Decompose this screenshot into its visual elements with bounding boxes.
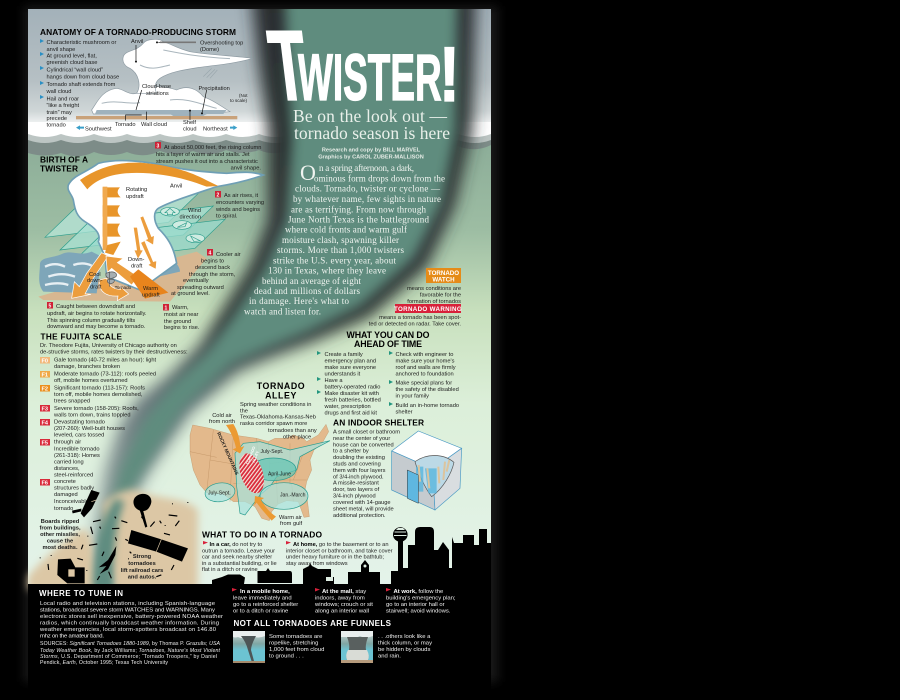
- storm cutaway labels: updraft: [126, 194, 144, 200]
- tornado alley text and map labels: tornadoes than any: [268, 428, 317, 434]
- thumbnail: rope tornado: [233, 631, 265, 663]
- what you can do lists: fresh batteries, bottled: [324, 398, 381, 404]
- anatomy labels: Northeast: [203, 126, 228, 132]
- where to tune in: Pendick, Earth, October 1995; Texas Tech University: [40, 660, 168, 666]
- tornado alley heading: ALLEY: [265, 390, 297, 400]
- what to do continued: At work, follow the: [394, 589, 444, 595]
- intro story text: [244, 160, 445, 316]
- indoor shelter text: A small closet or bathroom: [333, 430, 400, 436]
- what you can do lists: Create a family: [324, 352, 363, 358]
- fujita scale list: concrete: [54, 479, 76, 485]
- tornado watch and warning: means a tornado has been spot-: [379, 315, 461, 321]
- intro story text: strike the U.S. every year, about: [273, 256, 396, 266]
- tornado alley text and map labels: from north: [209, 419, 235, 425]
- storm cutaway labels: [87, 184, 201, 298]
- anatomy labels: Tornado: [115, 122, 136, 128]
- birth callouts: downward and may become a tornado.: [47, 324, 146, 330]
- tornado alley heading: TORNADO: [257, 381, 305, 391]
- fujita scale list: de-structive storms, rates twisters by their destructiveness:: [40, 350, 188, 356]
- byline: [318, 148, 424, 160]
- where to tune in: SOURCES: Significant Tornadoes 1880-1989, by Thomas P. Grazulis; USA: [40, 641, 221, 647]
- funnel captions: [269, 634, 432, 660]
- storm cutaway labels: down-: [87, 278, 103, 284]
- funnel captions: thick column, or may: [378, 640, 432, 646]
- what you can do lists: emergency plan and: [324, 358, 376, 364]
- intro story text: O: [300, 160, 316, 185]
- what you can do lists: the safety of the disabled: [396, 387, 459, 393]
- storm cutaway labels: Anvil: [170, 184, 182, 190]
- birth callouts: spreading outward: [177, 285, 224, 291]
- intro story text: behind an average of eight: [262, 276, 361, 286]
- what you can do lists: Have a: [324, 378, 343, 384]
- tornado alley text and map labels: [208, 402, 317, 527]
- anatomy labels: Shelf: [183, 120, 196, 126]
- anatomy labels: striations: [146, 91, 169, 97]
- fujita scale list: Moderate tornado (73-112): roofs peeled: [54, 372, 156, 378]
- not all tornadoes are funnels: NOT ALL TORNADOES ARE FUNNELS: [234, 619, 392, 628]
- intro story text: dead and millions of dollars: [254, 286, 360, 296]
- fujita scale list: off, mobile homes overturned: [54, 378, 128, 384]
- birth callouts: at ground level.: [171, 291, 210, 297]
- anatomy bullet list: hangs down from cloud base: [46, 74, 119, 80]
- birth callouts: hits a layer of warm air and stalls. Jet: [156, 152, 250, 158]
- fujita scale list: Gale tornado (40-72 miles an hour): light: [54, 358, 157, 364]
- anatomy bullet list: train” may: [46, 110, 72, 116]
- birth callouts: 5: [48, 304, 52, 310]
- anatomy labels: [85, 39, 248, 132]
- subtitle: Be on the look out —: [293, 106, 448, 126]
- what to do text: stay away from windows: [286, 561, 348, 567]
- indoor shelter text: sheet metal, will provide: [333, 506, 394, 512]
- where to tune in: Today Weather Book, by Jack Williams; Tornadoes, Nature's Most Violent: [40, 648, 221, 654]
- birth callouts: At about 50,000 feet, the rising column: [164, 145, 261, 151]
- fujita scale list: tornado: [54, 506, 73, 512]
- fujita scale list: F6: [42, 480, 48, 486]
- what you can do lists: anchored to foundation: [396, 372, 454, 378]
- sky and ground background: [28, 9, 491, 586]
- what to do continued: along an interior wall: [315, 608, 369, 614]
- what you can do lists: Make special plans for: [396, 380, 452, 386]
- intro story text: n a spring afternoon, a dark,: [319, 163, 414, 173]
- debris captions: most deaths.: [42, 545, 78, 551]
- what to do text: in a substantial building, or lie: [202, 561, 277, 567]
- birth callouts: This spinning column gradually tilts: [47, 318, 135, 324]
- fujita scale list: Devastating tornado: [54, 420, 105, 426]
- fujita scale list: trees snapped: [54, 398, 90, 404]
- what you can do lists: water, prescription: [324, 404, 371, 410]
- storm cutaway labels: draft: [131, 264, 143, 270]
- indoor shelter text: 3/4-inch plywood: [333, 494, 376, 500]
- what you can do lists: make sure everyone: [324, 365, 376, 371]
- birth callouts: 1: [164, 306, 168, 312]
- byline: Graphics by CAROL ZUBER-MALLISON: [318, 154, 424, 160]
- storm cutaway labels: Wind: [188, 208, 201, 214]
- fujita scale list: torn off, mobile homes demolished,: [54, 392, 143, 398]
- tornado alley text and map labels: ALLEY: [252, 450, 260, 463]
- what to do heading: WHAT TO DO IN A TORNADO: [202, 530, 322, 540]
- tornado alley text and map labels: ROCKY MOUNTAINS: [216, 431, 239, 476]
- indoor shelter text: of 3/4-inch plywood.: [333, 474, 384, 480]
- what to do text: interior closet or bathroom, and take cover: [286, 548, 393, 554]
- anatomy bullet list: Characteristic mushroom or: [46, 40, 116, 46]
- debris captions: other missiles,: [40, 532, 80, 538]
- where to tune in: WHERE TO TUNE IN: [39, 589, 123, 598]
- anatomy labels: (Not: [239, 93, 248, 98]
- what to do continued: leave immediately and: [233, 596, 292, 602]
- what to do continued: go to an interior hall or: [386, 602, 445, 608]
- what you can do lists: roof and walls are firmly: [396, 365, 456, 371]
- where to tune in: Storms, U.S. Department of Commerce; “Tornado Troopers,” by Daniel: [40, 654, 217, 660]
- birth callouts: moist air near: [164, 312, 199, 318]
- what to do text: car and seek nearby shelter: [202, 554, 272, 560]
- tornado alley text and map labels: Texas-Oklahoma-Kansas-Neb: [240, 414, 316, 420]
- anatomy bullet list: Cylindrical “wall cloud”: [46, 68, 103, 74]
- debris captions: cause the: [47, 538, 73, 544]
- debris captions: Strong: [133, 554, 152, 560]
- car: [212, 574, 245, 584]
- anatomy labels: Cloud-base: [142, 84, 171, 90]
- intro story text: storms. More than 1,000 twisters: [277, 245, 404, 255]
- fujita scale list: Dr. Theodore Fujita, University of Chicago authority on: [40, 343, 177, 349]
- anatomy labels: to scale): [230, 98, 248, 103]
- funnel captions: to ground . . .: [269, 654, 304, 660]
- tornado watch and warning: formation of tornados: [407, 299, 461, 305]
- reunion tower: [398, 541, 403, 573]
- indoor shelter text: [333, 430, 400, 519]
- indoor shelter text: additional protection.: [333, 513, 386, 519]
- subtitle: [293, 106, 450, 143]
- debris captions: from buildings,: [39, 526, 81, 532]
- fujita scale list: F1: [42, 372, 48, 378]
- subtitle: tornado season is here: [294, 123, 450, 143]
- what you can do lists: Build an in-home tornado: [396, 403, 459, 409]
- indoor shelter text: studs and covering: [333, 462, 381, 468]
- title: T: [263, 10, 313, 122]
- funnel captions: be hidden by clouds: [378, 647, 430, 653]
- debris captions: Boards ripped: [41, 519, 80, 525]
- what to do continued: In a mobile home,: [240, 589, 290, 595]
- title: WISTER: [298, 42, 442, 115]
- birth callouts: As air rises, it: [224, 193, 259, 199]
- fujita scale list: F3: [42, 406, 48, 412]
- indoor shelter text: house can be converted: [333, 442, 394, 448]
- what you can do lists: battery-operated radio: [324, 384, 380, 390]
- where to tune in: Local radio and television stations, including Spanish-language: [40, 601, 216, 607]
- what to do continued: or to a ditch or ravine: [233, 608, 289, 614]
- intro story text: moisture clash, spawning killer: [282, 235, 399, 245]
- byline: Research and copy by BILL MARVEL: [322, 148, 421, 154]
- fujita scale list: damage, branches broken: [54, 364, 120, 370]
- tornado watch and warning: favorable for the: [420, 292, 461, 298]
- birth callouts: descend back: [195, 265, 230, 271]
- fujita scale list: through air: [54, 440, 81, 446]
- intro story text: by whatever name, few sights in nature: [293, 194, 441, 204]
- anatomy bullet list: [40, 39, 119, 128]
- birth callouts: through the storm,: [189, 272, 236, 278]
- what you can do heading: AHEAD OF TIME: [354, 339, 422, 349]
- storm cutaway labels: draft: [90, 284, 102, 290]
- anatomy labels: Precipitation: [198, 86, 230, 92]
- fujita scale list: Severe tornado (158-205): Roofs,: [54, 406, 139, 412]
- birth callouts: winds and begins: [215, 207, 260, 213]
- what you can do lists: Make disaster kit with: [324, 391, 379, 397]
- what to do text: At home, go to the basement or to an: [293, 542, 388, 548]
- birth callouts: encounters varying: [216, 200, 264, 206]
- birth callouts: 3: [156, 144, 160, 150]
- fujita scale list: leveled, cars tossed: [54, 432, 104, 438]
- what to do text: outrun a tornado. Leave your: [202, 548, 275, 554]
- anatomy labels: cloud: [183, 126, 197, 132]
- anatomy labels: (Dome): [200, 47, 219, 53]
- what to do continued: indoors, away from: [315, 596, 365, 602]
- tornado watch and warning: WATCH: [432, 276, 455, 284]
- fujita scale list: structures badly: [54, 486, 94, 492]
- tornado alley text and map labels: Warm air: [279, 515, 302, 521]
- indoor shelter text: to a shelter by: [333, 448, 369, 454]
- indoor shelter text: near the center of your: [333, 436, 390, 442]
- debris captions: and autos.: [128, 574, 157, 580]
- funnel captions: and rain.: [378, 654, 401, 660]
- fujita scale list: Incredible tornado: [54, 446, 100, 452]
- fujita scale list: F4: [42, 420, 49, 426]
- anatomy bullet list: greenish cloud base: [46, 60, 97, 66]
- what to do continued: At the mall, stay: [322, 589, 366, 595]
- indoor shelter text: door, two layers of: [333, 487, 380, 493]
- where to tune in: radios, which continually broadcast weather information. During: [40, 620, 219, 626]
- what to do continued: [232, 588, 456, 614]
- what to do text: under heavy furniture or in the bathtub;: [286, 554, 384, 560]
- what you can do lists: drugs and first aid kit: [324, 410, 377, 416]
- intro story text: where cold fronts and warm gulf: [285, 224, 407, 234]
- where to tune in: electronic stores sell inexpensive, battery-powered NOAA weather: [40, 614, 223, 620]
- debris captions: lift railroad cars: [121, 568, 163, 574]
- debris captions: tornadoes: [128, 561, 156, 567]
- intro story text: ominous form drops down from the: [314, 174, 445, 184]
- fujita scale list: (207-260): Well-built houses: [54, 426, 125, 432]
- anatomy bullet list: “like a freight: [46, 103, 79, 109]
- anatomy bullet list: precede: [46, 116, 67, 122]
- what to do text: flat in a ditch or ravine: [202, 567, 258, 573]
- birth callouts: begins to rise.: [164, 325, 200, 331]
- where to tune in: [39, 589, 223, 666]
- fujita scale list: distances,: [54, 466, 80, 472]
- anatomy labels: Wall cloud: [141, 122, 167, 128]
- house: [303, 563, 334, 585]
- fujita scale list: Inconceivable: [54, 499, 89, 505]
- tornado alley heading: [257, 381, 305, 400]
- what to do continued: building's emergency plan;: [386, 596, 456, 602]
- birth callouts: 2: [216, 192, 220, 198]
- thumbnail: thick column tornado: [341, 631, 373, 663]
- storm cutaway labels: Down-: [128, 257, 145, 263]
- title: [263, 10, 460, 122]
- indoor shelter text: doubling the existing: [333, 455, 385, 461]
- intro story text: clouds. Tornado, twister or cyclone —: [295, 184, 441, 194]
- storm cutaway labels: updraft: [142, 292, 160, 298]
- birth callouts: to spiral.: [216, 214, 238, 220]
- funnel captions: . . .others look like a: [378, 634, 431, 640]
- tornado funnel: [85, 0, 476, 600]
- mobile home: [258, 568, 292, 583]
- birth callouts: begins to: [201, 258, 224, 264]
- birth of a twister heading: BIRTH OF A: [40, 154, 88, 164]
- storm cutaway labels: Tornado: [115, 285, 132, 290]
- fujita scale list: Significant tornado (113-157): Roofs: [54, 386, 145, 392]
- tornado alley text and map labels: TORNADO: [245, 446, 256, 465]
- birth callouts: 4: [208, 250, 212, 256]
- indoor shelter text: them with four layers: [333, 468, 386, 474]
- tornado watch and warning: ted or detected on radar. Take cover.: [369, 322, 461, 328]
- what you can do heading: [346, 330, 430, 349]
- storm cutaway labels: direction: [180, 214, 201, 220]
- tornado alley text and map labels: July-Sept.: [260, 449, 283, 455]
- birth callouts: eventually: [183, 278, 209, 284]
- birth callouts: [47, 142, 264, 331]
- where to tune in: weather emergencies, local storm-spotters broadcast on 146.80: [39, 627, 217, 633]
- what you can do lists: understands it: [324, 372, 361, 378]
- birth callouts: Caught between downdraft and: [56, 304, 135, 310]
- storm cutaway labels: Rotating: [126, 187, 147, 193]
- anatomy bullet list: anvil shape: [46, 47, 75, 53]
- what to do continued: stairwell; avoid windows.: [386, 608, 451, 614]
- dallas skyline: [391, 527, 491, 585]
- birth callouts: Cooler air: [216, 252, 241, 258]
- us map: [190, 424, 330, 521]
- birth callouts: anvil shape.: [231, 166, 261, 172]
- intro story text: June North Texas is the battleground: [288, 214, 430, 224]
- tornado alley text and map labels: raska corridor spawn more: [240, 421, 307, 427]
- anatomy labels: Overshooting top: [200, 40, 243, 46]
- fujita scale list: carried long: [54, 460, 84, 466]
- what you can do heading: WHAT YOU CAN DO: [346, 330, 430, 340]
- indoor shelter text: covered with 14-gauge: [333, 500, 391, 506]
- birth callouts: stream pushes it out into a characteristic: [156, 159, 258, 165]
- what to do text: [202, 541, 393, 573]
- birth callouts: the ground: [164, 319, 191, 325]
- anatomy bullet list: At ground level, flat,: [46, 54, 97, 60]
- funnel captions: ropelike, stretching: [269, 640, 318, 646]
- what to do continued: windows; crouch or sit: [314, 602, 373, 608]
- anatomy bullet list: tornado: [46, 122, 66, 128]
- what you can do lists: [317, 351, 459, 416]
- what you can do lists: Check with engineer to: [396, 352, 453, 358]
- where to tune in: mhz on the amateur band.: [40, 634, 104, 640]
- storm cutaway labels: Warm: [143, 286, 158, 292]
- anatomy labels: Southwest: [85, 126, 112, 132]
- title: !: [439, 30, 460, 118]
- what to do text: In a car, do not try to: [210, 542, 262, 548]
- anatomy heading: ANATOMY OF A TORNADO-PRODUCING STORM: [40, 27, 236, 37]
- intro story text: are as terrifying. From now through: [291, 204, 426, 214]
- anatomy bullet list: Tornado shaft extends from: [46, 82, 116, 88]
- what you can do lists: make sure your home's: [396, 358, 455, 364]
- tornado alley text and map labels: Jan.-March: [280, 492, 306, 498]
- tornado watch and warning: [369, 268, 462, 328]
- birth of a twister heading: [40, 154, 88, 174]
- what you can do lists: shelter: [396, 410, 413, 416]
- debris captions: [39, 519, 163, 580]
- birth of a twister heading: TWISTER: [40, 164, 78, 174]
- fujita scale list: steel-reinforced: [54, 472, 93, 478]
- anatomy labels: Anvil: [131, 39, 143, 45]
- funnel captions: Some tornadoes are: [269, 634, 323, 640]
- shelter cube illustration: [392, 431, 462, 510]
- storm cutaway illustration: [38, 160, 263, 302]
- tornado alley text and map labels: Spring weather conditions in: [240, 402, 311, 408]
- not all tornadoes are funnels: [233, 619, 432, 663]
- birth callouts: Warm,: [172, 305, 189, 311]
- tornado alley text and map labels: July-Sept.: [208, 490, 231, 496]
- indoor shelter text: A missile-resistant: [333, 480, 379, 486]
- what you can do lists: in your family: [396, 394, 429, 400]
- panel glow: [24, 6, 498, 682]
- indoor shelter heading: AN INDOOR SHELTER: [333, 418, 424, 428]
- tornado alley text and map labels: April-June: [268, 472, 291, 478]
- skyline silhouettes: [212, 527, 491, 585]
- debris illustration: [28, 490, 198, 590]
- anatomy bullet list: wall cloud: [46, 89, 71, 95]
- fujita scale list: F0: [42, 358, 48, 364]
- anatomy bullet list: Hail and roar: [46, 96, 79, 102]
- tornado alley text and map labels: from gulf: [280, 521, 303, 527]
- fujita scale list: damaged: [54, 492, 78, 498]
- intro story text: watch and listen for.: [244, 306, 321, 316]
- tornado watch and warning: TORNADO: [428, 270, 459, 277]
- fujita scale list: [40, 343, 188, 512]
- funnel captions: 1,000 feet from cloud: [269, 647, 324, 653]
- birth callouts: updraft, air begins to rotate horizontally.: [47, 311, 147, 317]
- tornado alley text and map labels: Cold air: [212, 413, 232, 419]
- tornado watch and warning: TORNADO WARNING: [394, 306, 462, 313]
- what to do continued: go to a reinforced shelter: [233, 602, 298, 608]
- bottom black band: [28, 584, 491, 700]
- intro story text: in damage. Here's what to: [249, 296, 350, 306]
- fujita scale list: walls torn down, trains toppled: [53, 412, 131, 418]
- tornado alley text and map labels: the: [240, 408, 248, 414]
- fujita scale heading: THE FUJITA SCALE: [40, 332, 123, 342]
- where to tune in: stations, broadcast severe storm WATCHES and WARNINGS. Many: [40, 608, 215, 614]
- tornado alley text and map labels: other place: [283, 434, 311, 440]
- tornado watch and warning: means conditions are: [407, 286, 461, 292]
- fujita scale list: F2: [42, 386, 48, 392]
- anatomy storm illustration: [76, 39, 253, 130]
- intro story text: 130 in Texas, where they leave: [268, 266, 386, 276]
- mall: [348, 560, 380, 585]
- storm cutaway labels: Cool: [89, 272, 101, 278]
- fujita scale list: (261-318): Homes: [54, 453, 100, 459]
- fujita scale list: F5: [42, 440, 48, 446]
